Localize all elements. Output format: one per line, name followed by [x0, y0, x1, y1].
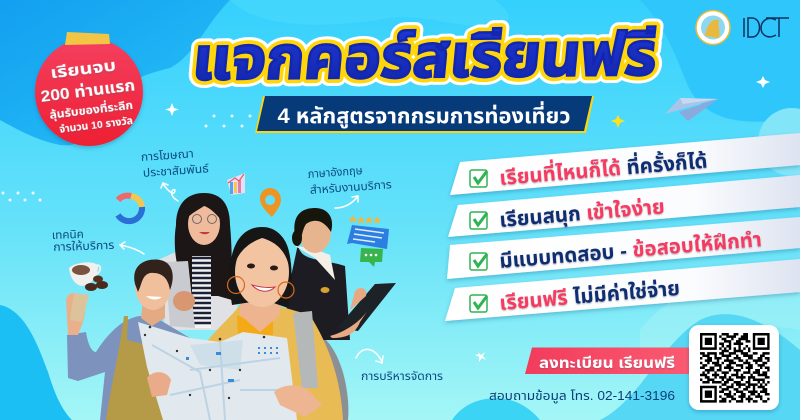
sparkles and dots	[2, 76, 770, 362]
label: service technique: การให้บริการ	[53, 238, 115, 254]
label: advertising: การโฆษณา	[140, 147, 194, 164]
title: แจกคอร์สเรียนฟรี	[190, 21, 660, 92]
checklist text: เรียนฟรี ไม่มีค่าใช่จ่าย	[498, 277, 681, 315]
label: service English	[307, 162, 393, 197]
red badge	[35, 32, 143, 146]
badge text	[37, 56, 140, 138]
person: barista man	[66, 260, 190, 420]
badge text: เรียนจบ	[49, 58, 117, 82]
contact text: สอบถามข้อมูล โทร. 02-141-3196	[489, 389, 675, 403]
icon: coffee and beans	[69, 262, 108, 291]
title: แจกคอร์สเรียนฟรี	[190, 21, 660, 92]
checklist text: เรียนสนุก เข้าใจง่าย	[498, 195, 666, 233]
logo: department seal	[696, 10, 730, 44]
badge text: 200 ท่านแรก	[40, 76, 136, 106]
register button	[525, 348, 690, 374]
label: service technique: เทคนิค	[52, 229, 84, 242]
register button: ลงทะเบียน เรียนฟรี	[539, 355, 675, 372]
subtitle banner	[255, 96, 594, 133]
map	[138, 322, 297, 420]
title: แจกคอร์สเรียนฟรี	[190, 21, 660, 92]
hands	[147, 372, 171, 397]
subtitle banner: 4 หลักสูตรจากกรมการท่องเที่ยว	[278, 101, 570, 129]
checklist text: เรียนที่ไหนก็ได้ ที่ครั้งก็ได้	[498, 146, 708, 190]
paper plane	[665, 98, 718, 121]
QR code card	[689, 325, 779, 410]
icon: rating chat bubbles	[347, 215, 389, 267]
label: service technique	[52, 228, 115, 254]
icon: donut chart	[118, 196, 142, 221]
checklist bars	[445, 133, 800, 321]
icon: bar chart	[227, 173, 245, 195]
person: main woman with map	[138, 227, 348, 420]
person: woman in black suit	[286, 208, 396, 340]
label: advertising	[140, 146, 209, 180]
label: service English: สำหรับงานบริการ	[309, 178, 393, 197]
logo: DOT	[744, 18, 789, 37]
check icons	[470, 170, 487, 312]
arrows	[120, 183, 383, 363]
badge text: จำนวน 10 รางวัล	[59, 115, 134, 136]
badge text: ลุ้นรับของที่ระลึก	[49, 97, 134, 122]
clipboard	[337, 283, 396, 331]
person: woman in stripes	[158, 193, 238, 330]
checklist text: มีแบบทดสอบ - ข้อสอบให้ฝึกทำ	[498, 228, 763, 273]
icon: map pin	[260, 188, 281, 217]
badge tape	[65, 32, 110, 45]
checklist text	[498, 146, 763, 315]
label: service English: ภาษาอังกฤษ	[307, 164, 363, 181]
label: management: การบริหารจัดการ	[361, 370, 443, 383]
backpack	[310, 340, 348, 420]
label: advertising: ประชาสัมพันธ์	[142, 162, 209, 180]
